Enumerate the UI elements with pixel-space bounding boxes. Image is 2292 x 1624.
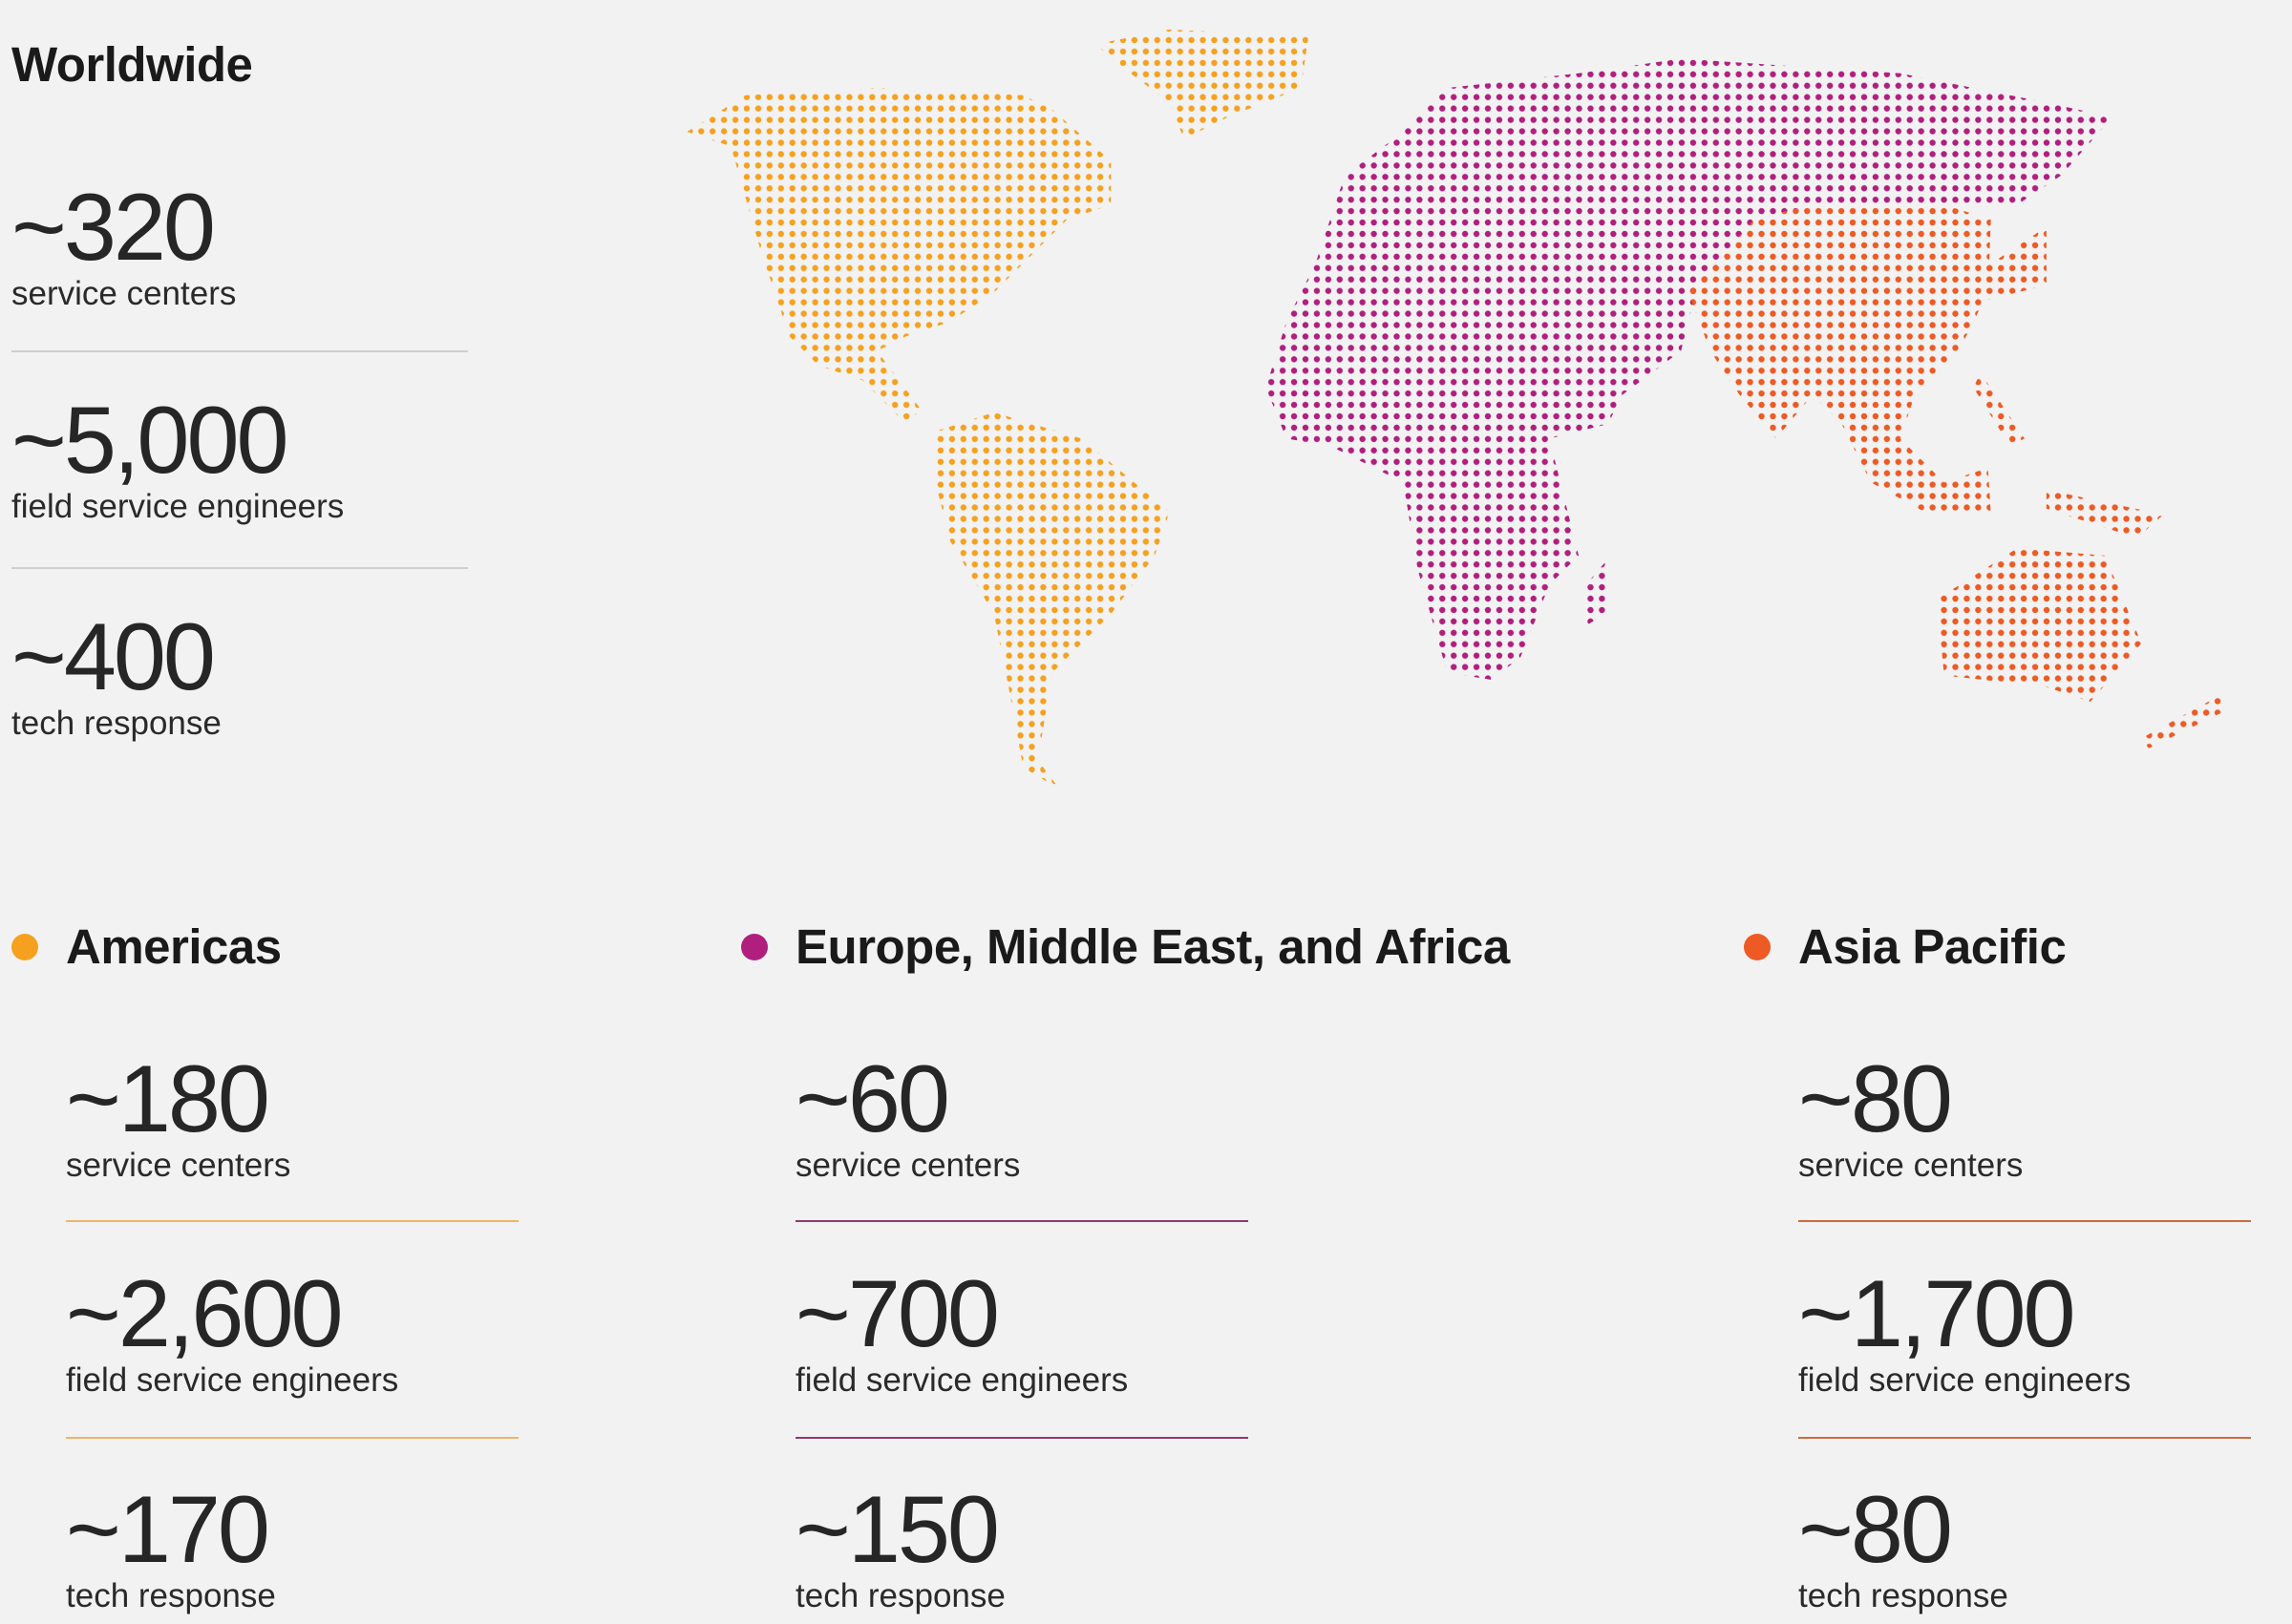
Americas stats xyxy=(66,1045,519,1614)
EMEA stats: field service engineers xyxy=(796,1361,1128,1399)
Americas stats: ~180 xyxy=(66,1045,267,1151)
Asia Pacific stats xyxy=(1798,1045,2251,1614)
Americas stats: tech response xyxy=(66,1577,276,1614)
map region: Europe, Middle East, and Africa xyxy=(1266,58,2112,680)
Asia Pacific stats: service centers xyxy=(1798,1147,2023,1184)
Asia Pacific stats: ~1,700 xyxy=(1798,1260,2073,1366)
Americas stats: ~170 xyxy=(66,1476,267,1582)
map region: Americas xyxy=(687,30,1308,790)
Asia Pacific stats: field service engineers xyxy=(1798,1361,2131,1399)
Asia Pacific stats: ~80 xyxy=(1798,1045,1950,1151)
stat: worldwide tech response: ~400 xyxy=(11,603,213,709)
EMEA stats xyxy=(796,1045,1248,1614)
legend: EMEA: Europe, Middle East, and Africa xyxy=(796,919,1510,974)
stat: worldwide field service engineers: ~5,000 xyxy=(11,387,286,493)
EMEA stats: service centers xyxy=(796,1147,1020,1184)
legend: Asia Pacific: Asia Pacific xyxy=(1798,919,2066,974)
legend: Americas: Americas xyxy=(66,919,282,974)
stat: worldwide service centers xyxy=(11,174,236,312)
stat: worldwide service centers: service centers xyxy=(11,275,236,312)
EMEA stats: ~60 xyxy=(796,1045,947,1151)
stat: worldwide field service engineers xyxy=(11,387,344,525)
Americas stats: service centers xyxy=(66,1147,290,1184)
Asia Pacific stats: ~80 xyxy=(1798,1476,1950,1582)
EMEA stats: tech response xyxy=(796,1577,1006,1614)
title: Worldwide: Worldwide xyxy=(11,37,252,92)
EMEA stats: ~150 xyxy=(796,1476,997,1582)
stat: worldwide field service engineers: field service engineers xyxy=(11,488,344,525)
Americas stats: ~2,600 xyxy=(66,1260,341,1366)
Asia Pacific stats: tech response xyxy=(1798,1577,2008,1614)
stat: worldwide tech response: tech response xyxy=(11,705,222,742)
stat: worldwide service centers: ~320 xyxy=(11,174,213,280)
Americas stats: field service engineers xyxy=(66,1361,398,1399)
map region: Asia Pacific xyxy=(1688,205,2229,749)
EMEA stats: ~700 xyxy=(796,1260,997,1366)
